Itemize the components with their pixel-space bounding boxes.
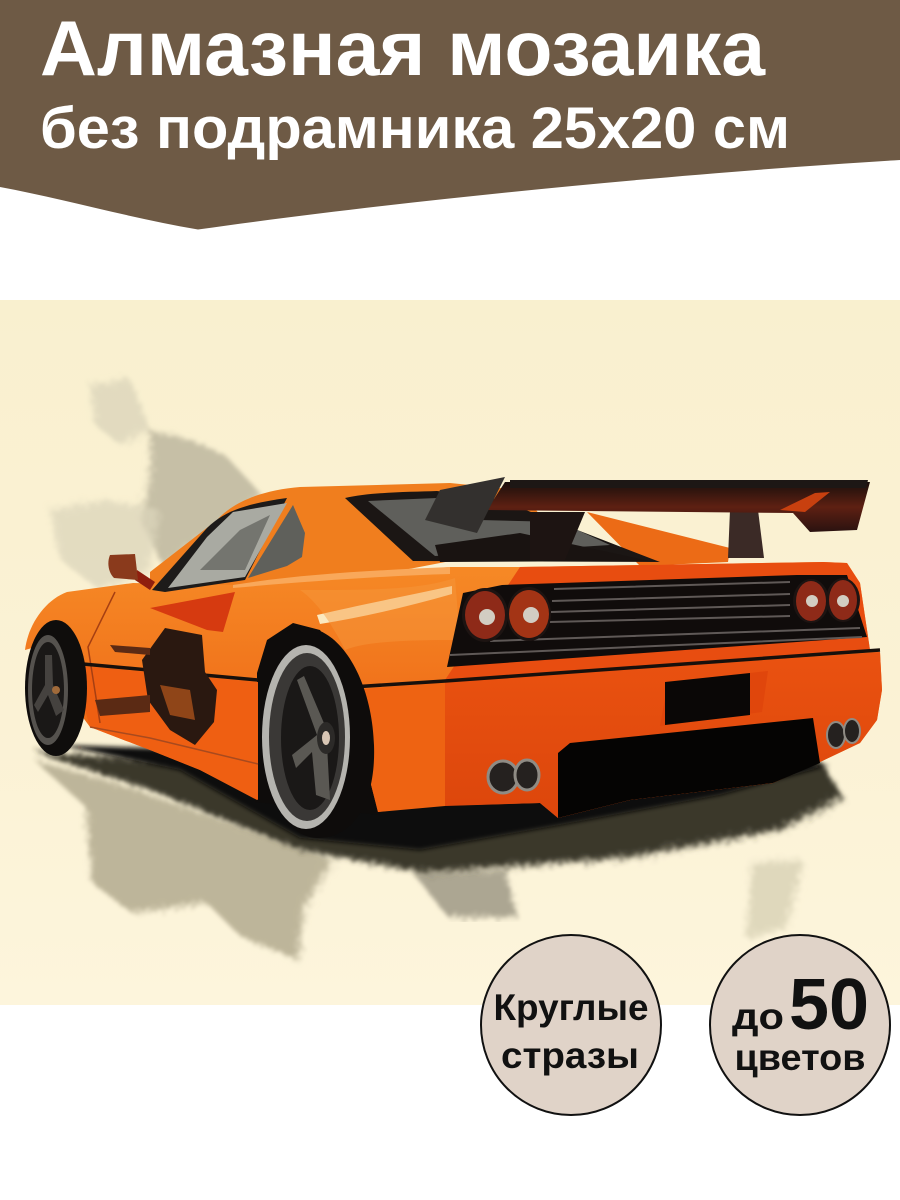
canvas background <box>0 300 900 1005</box>
car body <box>25 562 882 818</box>
tail lights <box>462 578 860 642</box>
side graphic <box>95 628 217 745</box>
paint smudges <box>34 378 804 960</box>
exhausts <box>488 719 860 793</box>
cabin and roof <box>150 483 560 595</box>
header banner <box>0 0 900 230</box>
badge: up to 50 colours: 50 <box>789 965 869 1045</box>
rear glass <box>368 498 610 556</box>
rear sail panel <box>587 512 730 566</box>
door shut line <box>88 592 115 723</box>
rear wing support, left <box>530 512 585 560</box>
badge: round rhinestones <box>481 935 661 1115</box>
title: Алмазная мозаика <box>40 4 766 92</box>
licence plate <box>660 671 768 726</box>
rear grille <box>447 575 867 667</box>
rear wing <box>425 477 870 533</box>
rear wheel <box>261 627 374 838</box>
side intake <box>150 592 235 632</box>
badge: up to 50 colours: до <box>732 996 784 1037</box>
rear quarter panel <box>352 682 445 812</box>
artwork: orange sports car <box>0 300 900 1005</box>
wheel arch shadow <box>255 621 380 815</box>
front wheel <box>25 620 87 756</box>
badge: round rhinestones: Круглые <box>494 987 648 1028</box>
rear diffuser <box>558 718 820 818</box>
body shading strokes <box>300 578 460 650</box>
rear wing support, right <box>728 510 764 558</box>
badge: up to 50 colours <box>710 935 890 1115</box>
subtitle: без подрамника 25х20 см <box>40 96 790 161</box>
body crease highlight <box>233 567 450 588</box>
badge: up to 50 colours: цветов <box>734 1037 866 1078</box>
rear window frame <box>345 491 660 562</box>
lower door panel <box>72 665 258 800</box>
side windows <box>152 498 305 592</box>
rear bumper <box>445 652 882 818</box>
sill pinstripe <box>90 727 258 764</box>
body line <box>72 650 880 687</box>
body highlight streak <box>317 586 452 624</box>
rear upper red panel <box>445 562 870 680</box>
ground shadow <box>34 745 843 873</box>
badge: round rhinestones: стразы <box>501 1035 639 1076</box>
side mirror <box>108 554 155 590</box>
